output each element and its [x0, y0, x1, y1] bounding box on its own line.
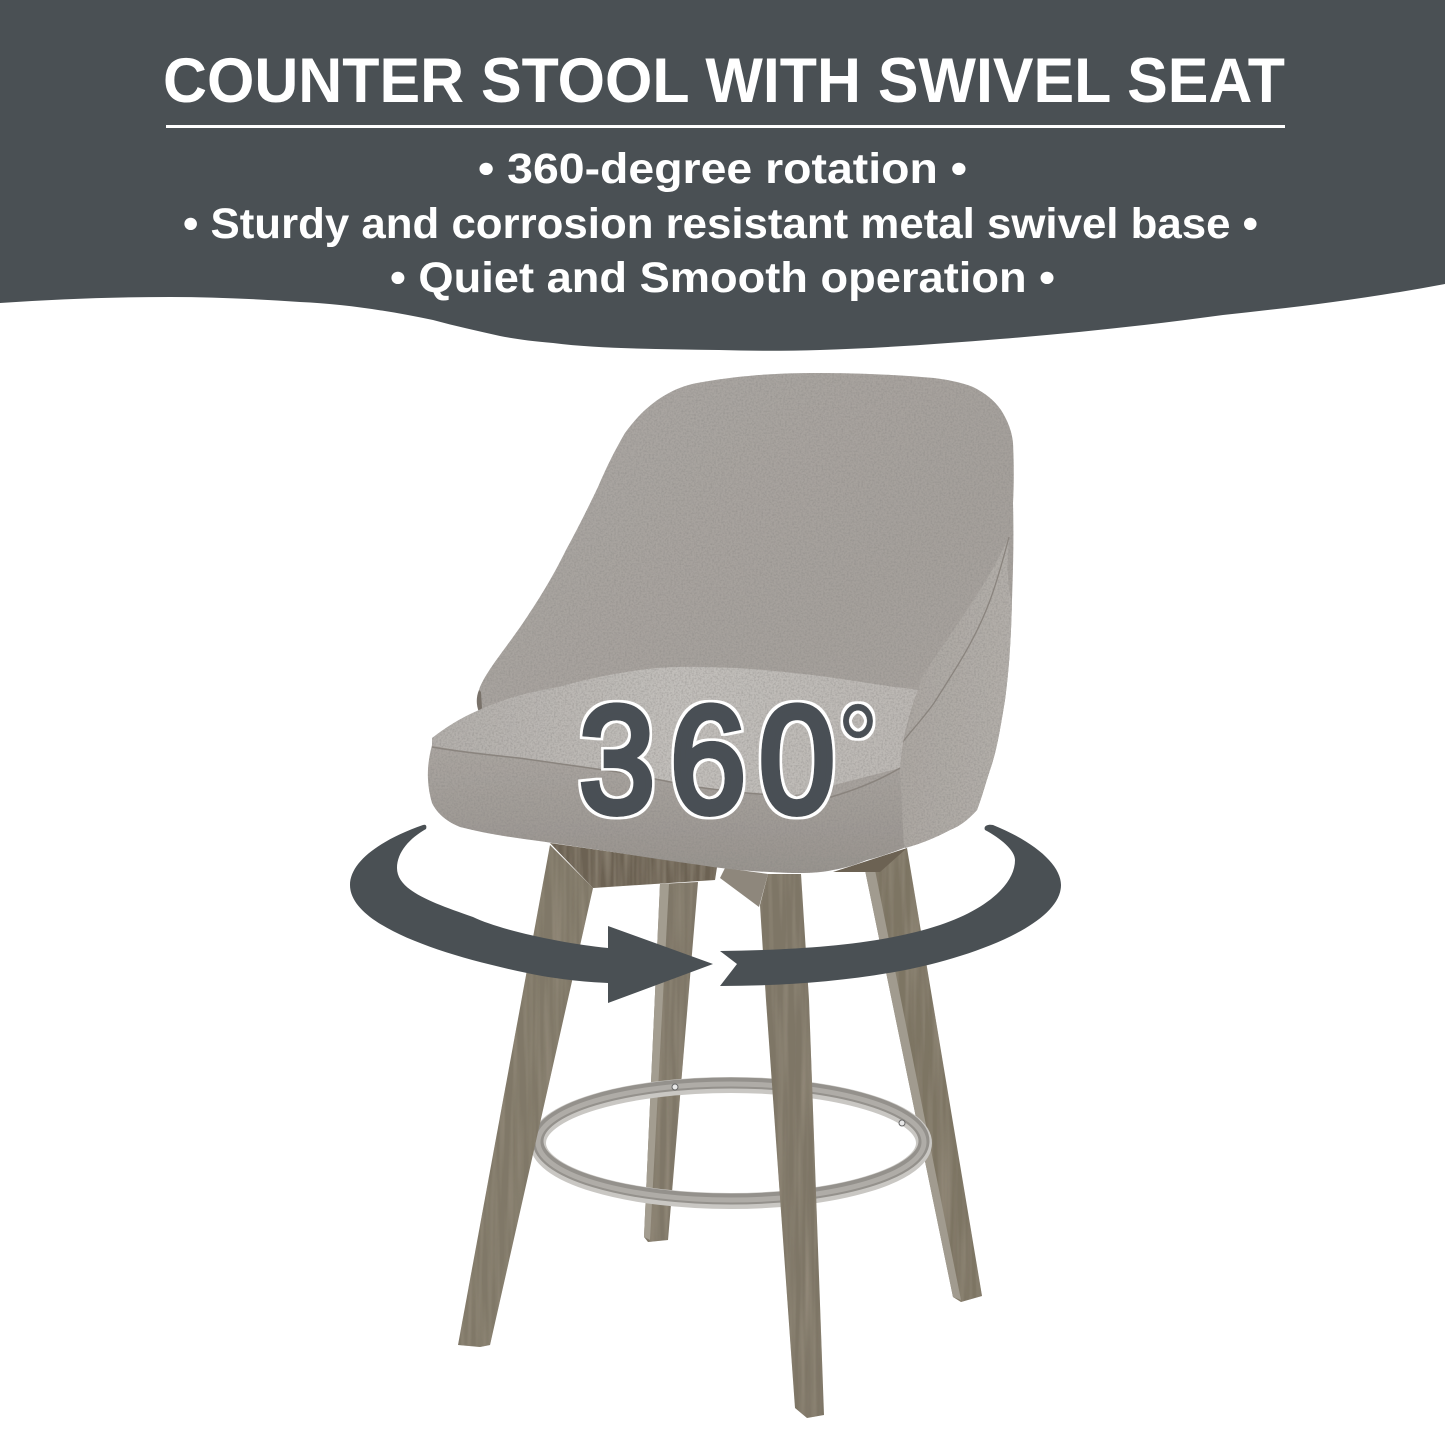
seat cushion top: [432, 667, 918, 800]
rotation arrow: right: [720, 825, 1061, 986]
rotation arrow: left: [350, 825, 713, 1003]
centre leg: [760, 874, 824, 1418]
header banner: [0, 0, 1445, 351]
digit 3: 3: [579, 675, 655, 845]
right leg: [865, 848, 982, 1302]
digit 0: 0: [759, 675, 835, 845]
feature: rotation: • 360-degree rotation •: [478, 145, 967, 193]
chair back shadow: [477, 690, 482, 712]
counter stool: [428, 373, 1014, 1418]
chair back: [479, 373, 1014, 848]
seat piping: [432, 747, 900, 797]
right arm: [900, 537, 1012, 848]
seat cushion front: [428, 745, 904, 873]
title underline: [166, 125, 1285, 128]
degree sign: °: [837, 679, 879, 815]
swivel brace: [550, 843, 907, 907]
left leg: [458, 845, 593, 1347]
back-left leg: [644, 882, 698, 1242]
arm seam: [902, 537, 1009, 743]
feature: operation: • Quiet and Smooth operation •: [390, 254, 1055, 302]
360 degree label: [579, 675, 879, 845]
title: COUNTER STOOL WITH SWIVEL SEAT: [163, 46, 1285, 116]
footrest ring: [538, 1083, 924, 1201]
feature: swivel base: • Sturdy and corrosion resistant metal swivel base •: [183, 200, 1258, 248]
digit 6: 6: [670, 675, 746, 845]
